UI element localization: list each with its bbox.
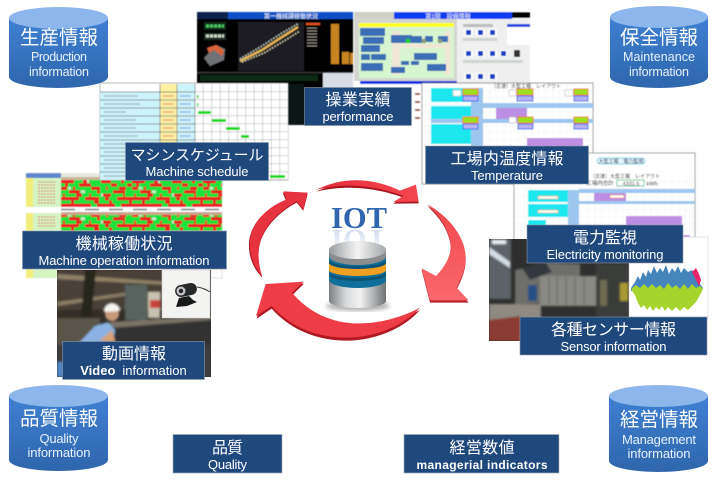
cylinder: maintenance information: 保全情報	[620, 27, 698, 49]
cylinder: management information	[609, 385, 708, 472]
cylinder: quality information: Quality	[40, 431, 79, 446]
screen: electricity layout: 4331.5	[623, 182, 639, 188]
label: electricity monitoring: 電力監視	[573, 229, 637, 247]
label: video information: 動画情報	[102, 345, 166, 363]
arrow: left clockwise	[249, 191, 308, 278]
label: sensor information	[520, 317, 707, 355]
icon: database cylinder	[326, 241, 390, 311]
screen: temperature layout: （志津）大型工場 レイアウト	[491, 83, 561, 90]
chart: sensor waveform	[629, 237, 708, 319]
screen: operations dashboard (performance)	[197, 12, 355, 125]
cylinder: management information: 経営情報	[620, 409, 698, 431]
label: managerial indicators	[404, 434, 559, 473]
label: electricity monitoring	[527, 225, 683, 263]
label: temperature: Temperature	[471, 168, 543, 183]
label: quality: Quality	[208, 457, 248, 472]
cylinder: quality information	[9, 385, 108, 471]
label: machine schedule	[126, 142, 268, 180]
label: performance: 操業実績	[326, 91, 390, 109]
screen: equipment information	[353, 11, 530, 125]
photo: factory machine	[489, 239, 629, 341]
screen: operations dashboard (performance): 第一機械課稼働状況	[264, 12, 318, 20]
cylinder: management information: information	[628, 446, 690, 461]
IOT cycle arrows	[249, 180, 469, 341]
label: temperature: 工場内温度情報	[450, 150, 564, 168]
arrow: top clockwise	[316, 180, 419, 204]
label: video information: Video information	[80, 363, 187, 378]
IOT title: IOT	[331, 223, 387, 258]
screen: electricity layout: 大型工場 電力監視	[598, 158, 644, 165]
cylinder: production information: Production	[31, 50, 87, 64]
cylinder: production information: 生産情報	[20, 27, 98, 49]
label: machine schedule: Machine schedule	[146, 164, 248, 179]
label: managerial indicators: managerial indicators	[416, 458, 548, 472]
icon: webcam inset	[162, 270, 210, 318]
cylinder: quality information: 品質情報	[20, 408, 98, 430]
screen: electricity layout	[514, 153, 695, 253]
label: temperature	[426, 146, 588, 184]
screen: temperature layout	[422, 83, 593, 184]
cylinder: management information: Management	[622, 432, 696, 447]
screen: equipment information: 第1閲 設備情報	[425, 12, 471, 20]
photo: factory video with worker	[57, 270, 211, 377]
label: video information	[62, 342, 204, 380]
screen: electricity layout: 工場内合計	[586, 179, 614, 187]
label: machine operation information: 機械稼働状況	[76, 235, 172, 253]
IOT title	[328, 200, 390, 258]
IOT title: IOT	[331, 200, 387, 235]
cylinder: quality information: information	[28, 445, 90, 460]
cylinder: production information: information	[29, 65, 89, 79]
screen: machine schedule gantt table	[100, 83, 288, 180]
label: machine operation information	[22, 231, 226, 269]
screen: electricity layout: kWh	[646, 182, 658, 188]
label: electricity monitoring: Electricity monitoring	[546, 247, 664, 262]
label: performance: performance	[322, 109, 394, 124]
label: sensor information: Sensor information	[560, 339, 666, 354]
cylinder: maintenance information: Maintenance	[623, 50, 695, 64]
screen: electricity layout: （志津）大型工場 レイアウト	[590, 173, 660, 180]
label: quality: 品質	[212, 439, 243, 457]
label: machine schedule: マシンスケジュール	[130, 147, 264, 164]
label: sensor information: 各種センサー情報	[551, 321, 676, 339]
label: quality	[173, 434, 282, 473]
arrow: bottom clockwise	[256, 282, 420, 341]
arrow: right clockwise	[422, 204, 469, 303]
screen: machine operation heat chart	[26, 172, 222, 278]
label: performance	[304, 88, 412, 126]
cylinder: production information	[9, 7, 108, 88]
label: managerial indicators: 経営数値	[450, 439, 514, 457]
label: machine operation information: Machine operation information	[38, 253, 210, 268]
cylinder: maintenance information: information	[629, 65, 689, 79]
cylinder: maintenance information	[610, 6, 708, 88]
